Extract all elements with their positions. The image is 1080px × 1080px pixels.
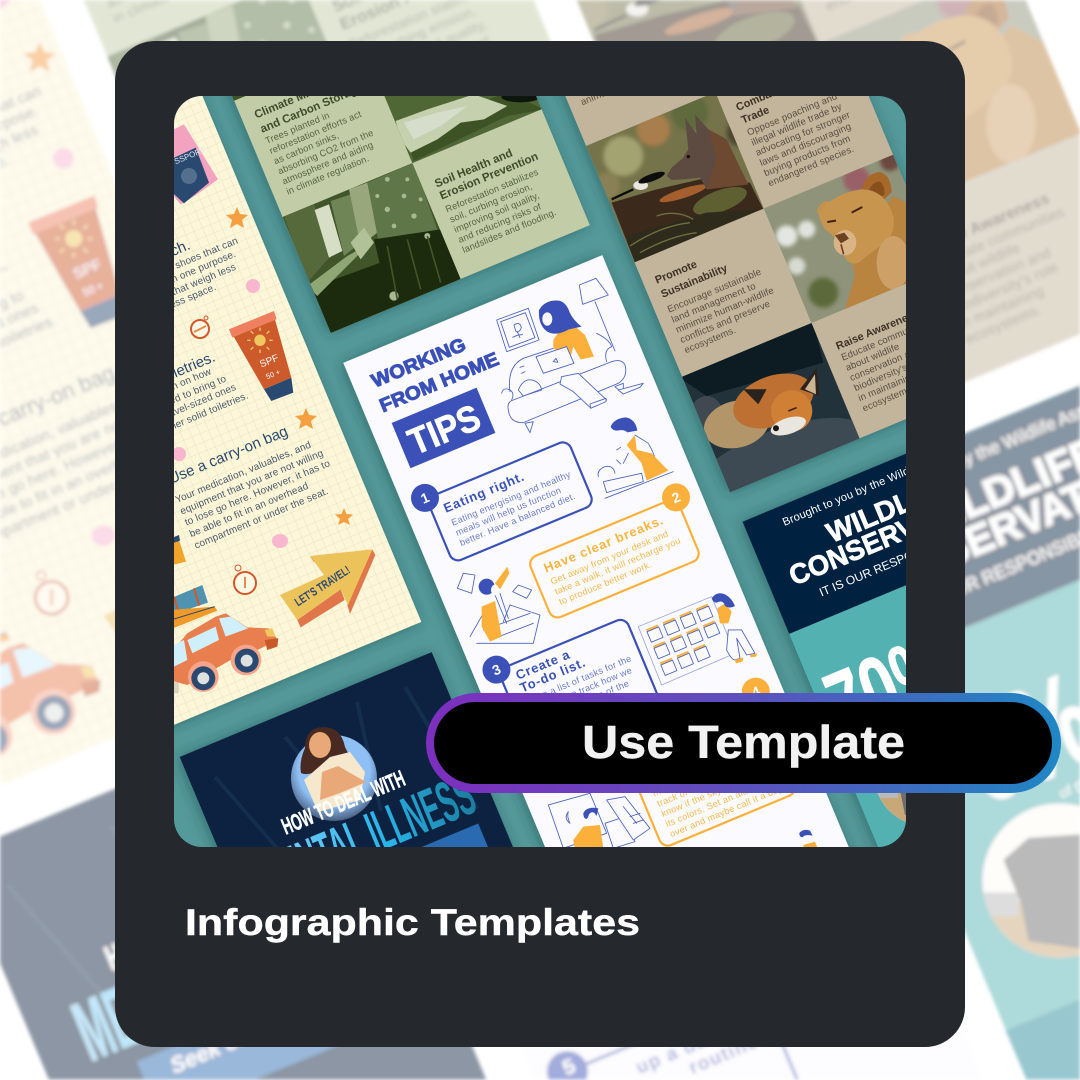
- text block: climate mitigation: [253, 68, 390, 197]
- photo: sleeping fox: [682, 323, 860, 492]
- step 1: eating right: meals will help us function: [454, 485, 563, 538]
- icon: compasses: [191, 316, 256, 594]
- text block: raise awareness: ecosystems.: [861, 383, 916, 414]
- step 3: create a to-do list: 3: [490, 661, 503, 679]
- text block: combat wildlife trade: advocating for stronger: [754, 109, 853, 159]
- illustration: woman with calendar: [638, 593, 757, 685]
- step 3: create a to-do list: Create a: [513, 647, 572, 683]
- text block: raise awareness: about wildlife: [844, 341, 901, 374]
- text block: combat wildlife trade: illegal wildlife trade by: [750, 101, 844, 149]
- panel: travel tips poster: Bring shoes that can: [149, 236, 240, 282]
- step 2: have clear breaks: to produce better work.: [557, 559, 653, 607]
- step 3: create a to-do list: tasks at hand to: [537, 701, 604, 737]
- step 5: daily routine: routine.: [673, 873, 729, 908]
- heading: working from home: WORKING: [369, 335, 469, 392]
- text block: combat wildlife trade: Combat Wildlife: [734, 71, 815, 114]
- preview image: template collage: [174, 96, 906, 847]
- heading: how to deal with: HOW TO DEAL WITH: [278, 765, 409, 839]
- panel: travel tips poster: Pack clothes that weigh less: [114, 262, 238, 322]
- text block: climate mitigation: atmosphere and aiding: [281, 140, 375, 186]
- header band: CONSERVATION: [784, 480, 996, 591]
- text block: climate mitigation: in climate regulation.: [285, 153, 371, 197]
- text block: climate mitigation: as carbon sinks,: [272, 130, 340, 166]
- step 4: stop when the day ends: make us lose track of time. Keep: [651, 735, 786, 799]
- text block: combat wildlife trade: laws and discouraging: [758, 121, 853, 169]
- step 2: have clear breaks: take a walk, it will recharge you: [553, 535, 682, 597]
- text block: promote sustainability: conflicts and preserve: [679, 299, 772, 346]
- text block: climate mitigation: reforestation efforts act: [268, 109, 363, 156]
- button: use template: [426, 693, 1061, 793]
- panel: travel tips poster: Plan on how: [156, 366, 214, 398]
- text block: raise awareness: in maintaining: [857, 370, 918, 404]
- text block: soil health: Soil Health and: [433, 147, 514, 190]
- text block: combat wildlife trade: Oppose poaching and: [746, 91, 839, 138]
- photo: elephant in circle: [870, 722, 990, 838]
- step 4: stop when the day ends: 4: [749, 683, 763, 701]
- text block: climate mitigation: Trees planted in: [264, 110, 331, 146]
- panel: travel tips poster: compartment or under the seat.: [193, 486, 330, 552]
- icon: sunscreen tube: SPF: [258, 353, 280, 370]
- text block: promote sustainability: ecosystems.: [683, 325, 738, 356]
- text block: soil health: [433, 139, 562, 255]
- illustration: stressed man with papers: [457, 567, 540, 643]
- statistic: 70 percent: is under threat from the: [930, 684, 1030, 734]
- step 5: daily routine: up a daily: [637, 868, 706, 908]
- illustration: woman in circle: [291, 727, 377, 821]
- panel: travel tips poster: and take less space.: [127, 282, 218, 328]
- panel: travel tips poster: Use a carry-on bag: [166, 423, 290, 488]
- text block: combat wildlife trade: [734, 63, 865, 189]
- panel: travel tips poster: or other solid toiletries.: [149, 390, 250, 441]
- heading: working from home: FROM HOME: [377, 349, 502, 417]
- photo: plant seedlings: [274, 159, 467, 339]
- panel: green reforestation poster: [202, 0, 590, 339]
- step 1: eating right: better. Have a balanced diet.: [458, 491, 577, 548]
- step 1: eating right: 1: [418, 489, 432, 507]
- step 5: daily routine: [545, 1047, 800, 1080]
- illustration: let's travel arrow: [280, 549, 375, 627]
- text block: climate mitigation: absorbing CO2 from the: [276, 128, 375, 176]
- statistic: 70 percent: 70%: [812, 615, 966, 755]
- illustration: woman on sofa with laptop: [497, 278, 643, 433]
- header band: Brought to you by the Wildlife Association: [781, 436, 983, 529]
- text block: soil health: improving soil quality,: [452, 190, 541, 235]
- step 1: eating right: [411, 441, 593, 562]
- callout: seek out help: [303, 824, 494, 908]
- text block: climate mitigation: and Carbon Storage: [259, 82, 365, 136]
- text block: soil health: and reducing risks of: [457, 201, 543, 245]
- icon: sunscreen tube: [229, 311, 293, 401]
- panel: travel tips poster: equipment that you are not willing: [179, 448, 325, 517]
- text block: soil health: Erosion Prevention: [438, 151, 540, 202]
- statistic: 70 percent: of the wildlife habitat: [924, 676, 1012, 722]
- text block: raise awareness: biodiversity's role: [852, 355, 927, 394]
- step 2: have clear breaks: Have clear breaks.: [541, 512, 666, 576]
- text block: intro line: animals and plants.: [579, 65, 662, 108]
- text block: promote sustainability: Promote: [653, 258, 699, 287]
- callout: seek out help: Seek out help: [323, 855, 419, 908]
- panel: travel tips poster: Pack for each.: [98, 237, 193, 289]
- text block: raise awareness: Raise Awareness: [834, 307, 921, 353]
- panel: travel tips poster: [0, 81, 421, 731]
- step 3: create a to-do list: accomplish some of the: [533, 678, 631, 727]
- step 2: have clear breaks: [529, 483, 700, 618]
- text block: climate mitigation: Climate Mitigation: [253, 72, 349, 121]
- text block: combat wildlife trade: buying products from: [762, 133, 852, 179]
- photo: lioness: [760, 149, 947, 329]
- heading: working from home: [369, 338, 500, 413]
- panel: travel tips poster: Your medication, valuables, and: [174, 440, 313, 506]
- panel: mental illness poster: MENTAL ILLNESS: [251, 762, 484, 909]
- header band: IT IS OUR RESPONSIBILITY: [817, 526, 968, 599]
- panel: travel tips poster: be able to fit in an overhead: [188, 481, 310, 540]
- icon: passport: [171, 124, 218, 204]
- step 4: stop when the day ends: its colors. Set an alarm to indicate: [664, 763, 803, 829]
- step 4: stop when the day ends: track of the day. Get to: [656, 762, 750, 809]
- panel: mental illness poster: [180, 652, 539, 909]
- icon: stars and petals: [172, 207, 353, 548]
- text block: promote sustainability: [654, 262, 774, 353]
- panel: travel tips poster: serve more than one purpose.: [107, 249, 238, 312]
- header band: [743, 414, 1048, 634]
- illustration: man at desk at night: [548, 793, 818, 850]
- step 3: create a to-do list: day to keep track how we: [528, 665, 633, 716]
- illustration: let's travel arrow: LET'S TRAVEL!: [292, 563, 353, 609]
- text block: raise awareness: [834, 305, 953, 415]
- icon: sunscreen tube: 50 +: [265, 367, 281, 381]
- photo: hand with soil: [384, 96, 542, 163]
- text block: promote sustainability: minimize human-wildlife: [674, 285, 776, 336]
- dark card: [115, 41, 965, 1047]
- text block: soil health: soil, curbing erosion,: [448, 181, 534, 225]
- panel: working from home tips poster: [343, 255, 874, 909]
- panel: travel tips poster: use travel-sized ones: [144, 382, 238, 430]
- step 3: create a to-do list: [482, 618, 658, 693]
- panel: travel tips poster: Minimize toiletries.: [97, 349, 218, 412]
- panel: wildlife conservation poster: [742, 414, 1080, 908]
- icon: passport: SSPORT: [173, 145, 207, 166]
- heading: tips badge: TIPS: [402, 397, 486, 463]
- illustration: car with luggage: [171, 535, 278, 693]
- header band: WILDLIFE: [822, 469, 958, 549]
- text block: raise awareness: conservation and: [848, 345, 922, 384]
- text block: raise awareness: Educate communities: [840, 317, 931, 364]
- step 2: have clear breaks: 2: [669, 488, 683, 506]
- step 1: eating right: Eating right.: [441, 469, 527, 516]
- step 3: create a to-do list: To-do list.: [518, 655, 588, 695]
- step 4: stop when the day ends: know if the sky changes: [660, 770, 759, 819]
- text block: soil health: Reforestation stabilizes: [444, 167, 540, 214]
- text block: combat wildlife trade: Trade: [740, 104, 771, 126]
- step 4: stop when the day ends: over and maybe call it a day.: [668, 782, 786, 839]
- step 1: eating right: Eating energising and healthy: [450, 469, 572, 528]
- text block: combat wildlife trade: endangered species.: [767, 144, 856, 189]
- text block: soil health: landslides and flooding.: [461, 207, 558, 255]
- text block: promote sustainability: Encourage sustainable: [666, 267, 763, 316]
- text block: promote sustainability: land management to: [670, 281, 758, 326]
- step 2: have clear breaks: Get away from your desk and: [549, 529, 670, 587]
- button: use template: Use Template: [582, 716, 905, 768]
- photo: deer and magpie: [580, 86, 770, 266]
- title: Infographic Templates: [185, 902, 640, 943]
- step 5: daily routine: 5: [588, 891, 601, 909]
- step 3: create a to-do list: Make a list of tasks for the: [524, 653, 633, 706]
- panel: travel tips poster: much you need to bring to: [114, 374, 228, 430]
- text block: promote sustainability: Sustainability: [659, 262, 729, 301]
- panel: wildlife sustainability poster: [537, 0, 989, 514]
- illustration: woman cooking: [598, 417, 673, 498]
- panel: travel tips poster: to lose go here. However, it has to: [183, 458, 332, 529]
- step 4: stop when the day ends: [638, 678, 794, 847]
- statistic: 70 percent: pressure of human activity: [935, 692, 1047, 747]
- step 4: stop when the day ends: Working from home can: [647, 740, 746, 788]
